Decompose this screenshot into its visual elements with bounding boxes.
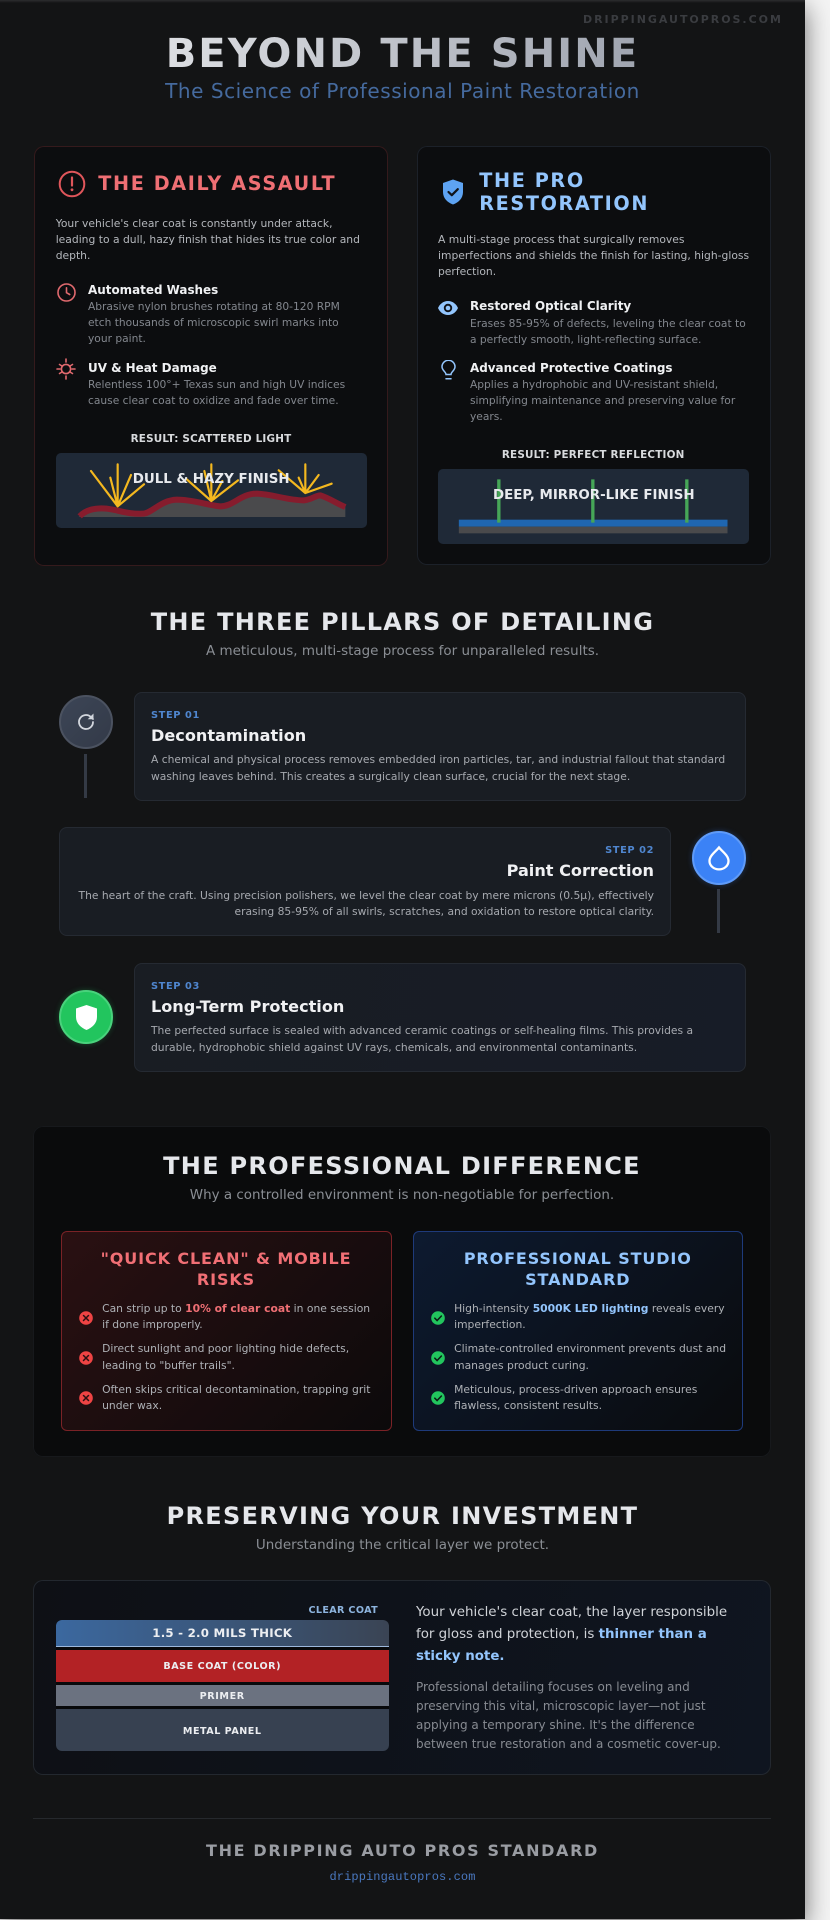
step title: Long-Term Protection xyxy=(151,996,344,1016)
step description: erasing 85-95% of all swirls, scratches, and oxidation to restore optical clarity. xyxy=(234,905,654,918)
result label: scattered light: RESULT: SCATTERED LIGHT xyxy=(131,433,291,445)
explainer lead text: Your vehicle's clear coat, the layer responsible xyxy=(416,1605,727,1620)
step description: The perfected surface is sealed with advanced ceramic coatings or self-healing films. This provides a xyxy=(151,1024,693,1037)
benefit text: flawless, consistent results. xyxy=(454,1399,602,1412)
benefit text: Meticulous, process-driven approach ensures xyxy=(454,1383,697,1396)
step description xyxy=(78,888,654,918)
chart: level surface with straight reflections xyxy=(458,479,728,534)
panel: the pro restoration xyxy=(417,146,771,565)
footer url: drippingautopros.com xyxy=(329,1870,476,1884)
label: uv and heat damage: UV & Heat Damage xyxy=(88,361,217,375)
risk item 2 xyxy=(79,1342,349,1372)
title xyxy=(0,30,805,76)
footer title: THE DRIPPING AUTO PROS STANDARD xyxy=(206,1841,599,1860)
intro text xyxy=(438,233,749,278)
benefit text: imperfection. xyxy=(454,1318,526,1331)
description: advanced protective coatings: years. xyxy=(470,410,503,423)
card heading: "QUICK CLEAN" & MOBILE xyxy=(101,1249,351,1268)
step 03: long-term protection xyxy=(56,963,746,1072)
risk text: leading to "buffer trails". xyxy=(102,1359,235,1372)
risk text xyxy=(102,1342,349,1372)
card heading: RISKS xyxy=(197,1270,255,1289)
intro text: leading to a dull, hazy finish that hides its true color and xyxy=(56,233,360,246)
benefit item 3 xyxy=(414,1372,739,1412)
benefit text: Climate-controlled environment prevents dust and xyxy=(454,1342,726,1355)
icon circle: refresh xyxy=(59,695,113,749)
description: restored optical clarity: a perfectly smooth, light-reflecting surface. xyxy=(470,333,701,346)
panel: clear coat explainer xyxy=(33,1580,771,1775)
explainer lead text: for gloss and protection, is thinner than a xyxy=(416,1627,707,1642)
heading: the daily assault: THE DAILY ASSAULT xyxy=(98,172,336,195)
icon: x mark xyxy=(79,1391,93,1405)
description: restored optical clarity xyxy=(470,317,746,346)
icon: water drop xyxy=(708,846,730,870)
step number: STEP 03 xyxy=(151,981,200,992)
risk text xyxy=(102,1302,370,1331)
layer: clear coat: 1.5 - 2.0 MILS THICK xyxy=(152,1626,292,1640)
description: restored optical clarity: Erases 85-95% of defects, leveling the clear coat to xyxy=(470,317,746,330)
risk text: if done improperly. xyxy=(102,1318,203,1331)
label: automated washes: Automated Washes xyxy=(88,283,218,297)
intro text xyxy=(56,217,360,262)
heading: three pillars: THE THREE PILLARS OF DETAILING xyxy=(151,608,654,636)
icon: eye xyxy=(438,301,458,315)
explainer body text: between true restoration and a cosmetic cover-up. xyxy=(416,1737,721,1751)
layer: metal panel xyxy=(56,1709,389,1751)
description: automated washes: your paint. xyxy=(88,332,146,345)
benefit text: manages product curing. xyxy=(454,1359,589,1372)
description: uv and heat damage: Relentless 100°+ Texas sun and high UV indices xyxy=(88,378,345,391)
icon: refresh arrow xyxy=(78,714,94,730)
description: advanced protective coatings: Applies a hydrophobic and UV-resistant shield, xyxy=(470,378,718,391)
heading: the pro restoration: THE PRO xyxy=(479,168,585,192)
connector line xyxy=(717,889,720,933)
card heading: PROFESSIONAL STUDIO xyxy=(464,1249,692,1268)
chart: rough surface with scattered rays xyxy=(78,463,346,518)
step description: washing leaves behind. This creates a surgically clean surface, crucial for the next stage. xyxy=(151,770,630,783)
heading: professional difference: THE PROFESSIONAL DIFFERENCE xyxy=(163,1152,641,1180)
layer: base coat xyxy=(56,1650,389,1682)
diagram: scattered light xyxy=(56,453,367,528)
benefit item 1 xyxy=(431,1302,725,1331)
layer: primer xyxy=(56,1685,389,1706)
card heading xyxy=(464,1249,692,1289)
benefit text: High-intensity 5000K LED lighting reveals every xyxy=(454,1302,725,1315)
heading: preserving your investment: PRESERVING YOUR INVESTMENT xyxy=(167,1502,638,1530)
icon: light bulb xyxy=(441,360,456,380)
benefit text xyxy=(454,1382,697,1414)
item: restored optical clarity xyxy=(438,299,746,346)
item: uv and heat damage xyxy=(56,358,345,407)
intro text: perfection. xyxy=(438,265,496,278)
diagram caption: dull and hazy finish: DULL & HAZY FINISH xyxy=(133,472,290,487)
explainer body text: preserving this vital, microscopic layer—not just xyxy=(416,1699,706,1713)
comparison card: quick clean risks xyxy=(61,1231,392,1431)
label: clear coat: CLEAR COAT xyxy=(308,1605,378,1616)
step number: STEP 02 xyxy=(605,845,654,856)
explainer lead text: sticky note. xyxy=(416,1649,504,1664)
card heading: STANDARD xyxy=(525,1270,630,1289)
risk text xyxy=(102,1383,370,1412)
step 02: paint correction xyxy=(59,827,749,936)
risk item 3 xyxy=(79,1383,370,1412)
layer diagram xyxy=(56,1620,389,1751)
card: decontamination xyxy=(134,692,746,801)
icon: x mark xyxy=(79,1351,93,1365)
risk item 1 xyxy=(79,1302,370,1331)
card heading xyxy=(101,1249,351,1289)
description: automated washes: Abrasive nylon brushes rotating at 80-120 RPM xyxy=(88,300,340,313)
title: BEYOND THE SHINE xyxy=(166,30,639,76)
icon: shield xyxy=(76,1005,97,1030)
card: paint correction xyxy=(59,827,671,936)
risk text: Often skips critical decontamination, trapping grit xyxy=(102,1383,370,1396)
icon: check mark xyxy=(431,1311,445,1325)
intro text: depth. xyxy=(56,249,90,262)
heading: the pro restoration xyxy=(479,168,649,215)
description: uv and heat damage xyxy=(88,378,345,407)
icon: check mark xyxy=(431,1391,445,1405)
subheading: professional difference: Why a controlled environment is non-negotiable for perfection. xyxy=(190,1188,614,1203)
layer: primer: PRIMER xyxy=(200,1691,245,1702)
step 01: decontamination xyxy=(59,692,746,801)
brand watermark: DRIPPINGAUTOPROS.COM xyxy=(583,13,783,26)
explainer body text: Professional detailing focuses on leveling and xyxy=(416,1680,690,1694)
label: advanced protective coatings: Advanced Protective Coatings xyxy=(470,361,672,375)
diagram: perfect reflection xyxy=(438,469,749,544)
diagram caption: deep mirror-like finish: DEEP, MIRROR-LIKE FINISH xyxy=(493,488,695,503)
label: restored optical clarity: Restored Optical Clarity xyxy=(470,299,631,313)
intro text: imperfections and shields the finish for lasting, high-gloss xyxy=(438,249,749,262)
icon circle: shield xyxy=(59,990,113,1044)
card: long-term protection xyxy=(134,963,746,1072)
benefit item 2 xyxy=(414,1332,739,1372)
icon: check mark xyxy=(431,1351,445,1365)
description: automated washes xyxy=(88,300,340,345)
explainer body text: applying a temporary shine. It's the difference xyxy=(416,1718,695,1732)
step description xyxy=(150,1024,693,1054)
explainer body text xyxy=(416,1678,721,1753)
icon: x mark xyxy=(79,1311,93,1325)
result label: perfect reflection: RESULT: PERFECT REFLECTION xyxy=(502,449,685,461)
risk text: Direct sunlight and poor lighting hide defects, xyxy=(102,1342,349,1355)
layer: base coat: BASE COAT (COLOR) xyxy=(163,1661,281,1672)
risk text: Can strip up to 10% of clear coat in one session xyxy=(102,1302,370,1315)
step description: The heart of the craft. Using precision polishers, we level the clear coat by mere microns (0.5µ), effectively xyxy=(79,888,654,902)
benefit text xyxy=(454,1341,726,1374)
benefit text xyxy=(454,1301,725,1333)
connector line xyxy=(84,754,87,798)
icon: alert circle xyxy=(58,170,86,198)
layer: metal panel: METAL PANEL xyxy=(183,1726,261,1737)
icon circle: drop xyxy=(692,831,746,885)
panel: the daily assault xyxy=(34,146,388,566)
step title: Paint Correction xyxy=(507,861,654,880)
intro text: Your vehicle's clear coat is constantly under attack, xyxy=(56,217,333,230)
item: advanced protective coatings xyxy=(441,360,736,423)
step title: Decontamination xyxy=(151,726,306,744)
step description xyxy=(151,753,725,783)
step description: durable, hydrophobic shield against UV rays, chemicals, and environmental contaminants. xyxy=(151,1041,637,1054)
description: advanced protective coatings: simplifying maintenance and preserving value for xyxy=(470,394,735,407)
intro text: A multi-stage process that surgically removes xyxy=(438,233,684,246)
description: advanced protective coatings xyxy=(470,378,736,423)
risk text: under wax. xyxy=(102,1399,162,1412)
icon: shield check xyxy=(443,180,463,204)
step number: STEP 01 xyxy=(151,710,200,721)
subheading: preserving your investment: Understanding the critical layer we protect. xyxy=(256,1538,549,1553)
subtitle: The Science of Professional Paint Restoration xyxy=(165,78,640,102)
description: automated washes: etch thousands of microscopic swirl marks into xyxy=(88,316,339,329)
panel: the professional difference xyxy=(33,1126,771,1457)
subheading: three pillars: A meticulous, multi-stage process for unparalleled results. xyxy=(206,644,599,659)
step description: A chemical and physical process removes embedded iron particles, tar, and industrial fallout that standard xyxy=(151,753,725,766)
comparison card: professional studio xyxy=(413,1231,743,1431)
layer: clear coat xyxy=(56,1620,389,1647)
description: uv and heat damage: cause clear coat to oxidize and fade over time. xyxy=(88,394,339,407)
heading: the pro restoration: RESTORATION xyxy=(479,192,649,215)
icon: uv sun xyxy=(56,358,76,380)
item: automated washes xyxy=(57,283,340,345)
explainer lead text xyxy=(416,1602,727,1668)
icon: clock xyxy=(57,283,76,302)
